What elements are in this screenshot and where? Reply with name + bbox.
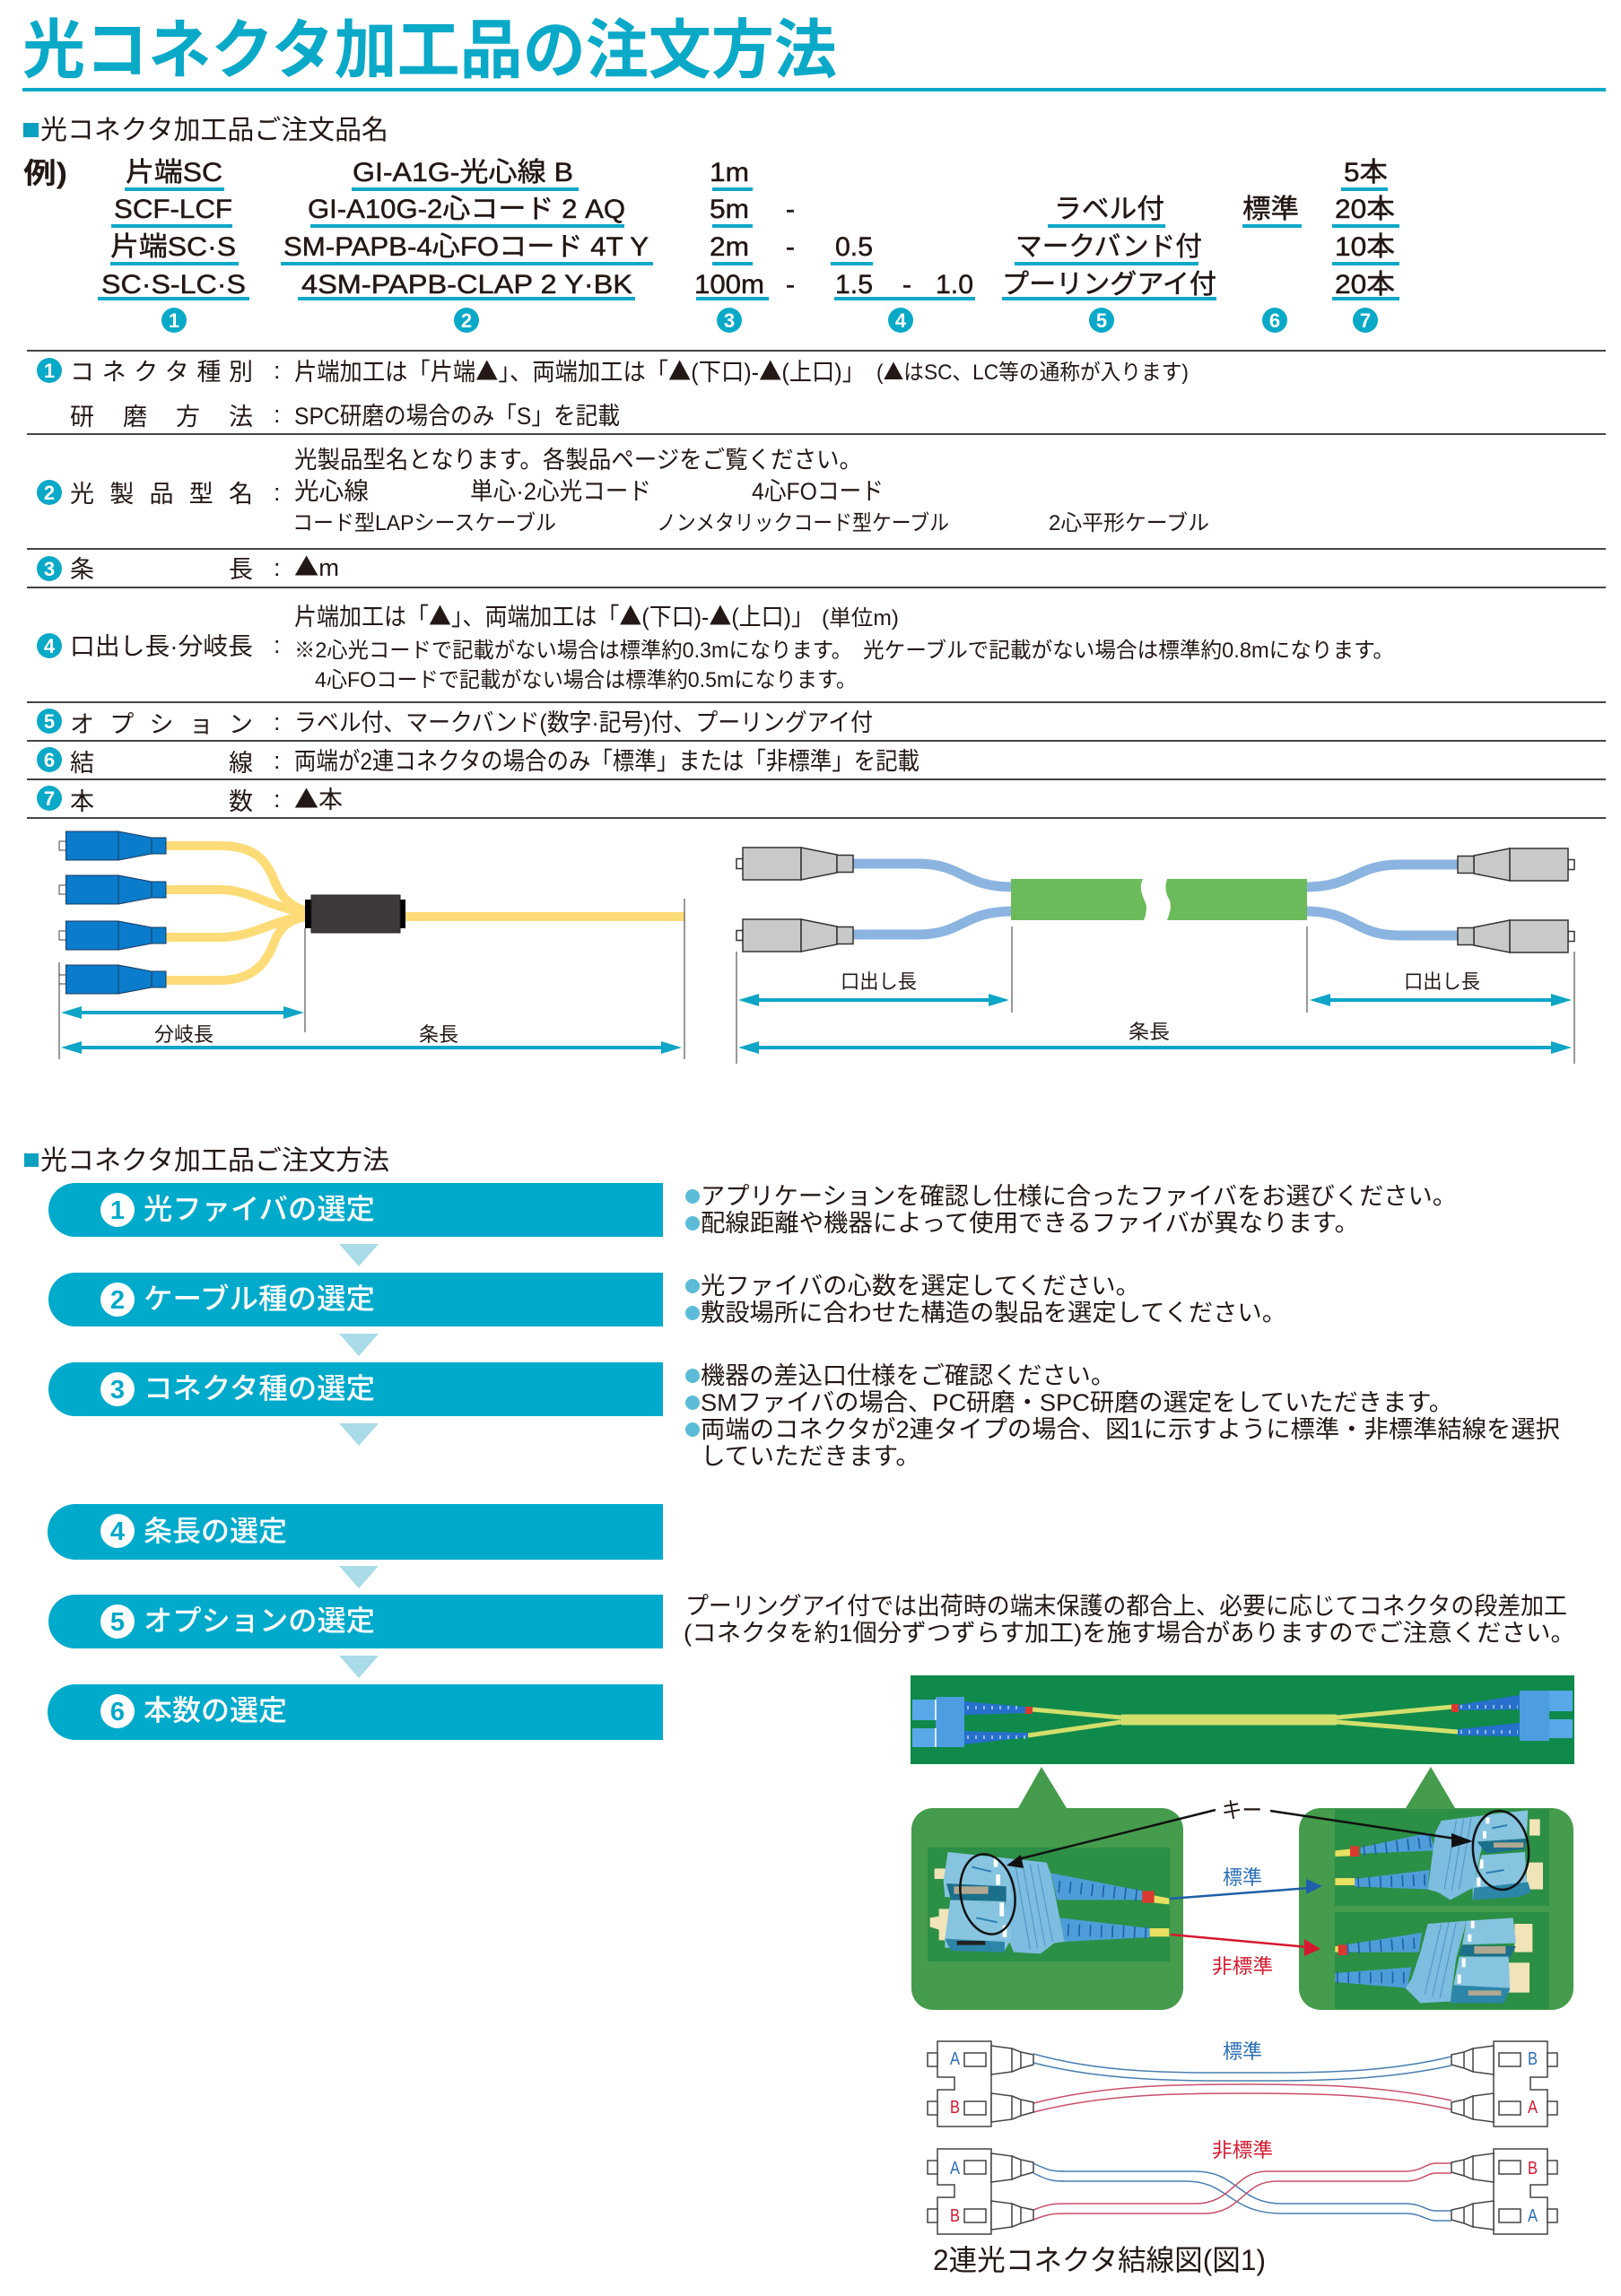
table row 6: wiring: 線 xyxy=(229,750,253,777)
lower connector: non-standard xyxy=(1335,1918,1532,2003)
column 3: length: - xyxy=(786,270,795,300)
port letters: A xyxy=(1528,2098,1538,2118)
step 1 notes xyxy=(685,1183,1457,1237)
table row 7: quantity: 7 xyxy=(44,787,55,810)
column number markers: 1 xyxy=(169,309,179,332)
column 6: wiring: 標準 xyxy=(1242,195,1299,224)
connectors xyxy=(59,831,166,994)
port letters: B xyxy=(1528,2049,1538,2069)
table row 7: quantity: ▲本 xyxy=(294,780,343,815)
column 5: options: ラベル付 xyxy=(1054,195,1164,224)
table row 5: options: : xyxy=(274,709,281,735)
table row 6: wiring xyxy=(37,747,919,777)
table row 4: breakout length: 片端加工は「▲」、両端加工は「▲(下口)-▲(上口)」 xyxy=(294,597,814,632)
example order codes: 例) xyxy=(23,157,67,189)
diagram: breakout cable with branch length xyxy=(59,831,685,1059)
step 6 bar: 6 xyxy=(110,1698,125,1726)
column number markers: 6 xyxy=(1269,309,1280,332)
title xyxy=(22,15,1606,91)
wiring diagram: non-standard: 非標準 xyxy=(1212,2139,1273,2161)
upper connector: standard xyxy=(1335,1810,1543,1900)
column number markers: 4 xyxy=(895,309,907,332)
port letters xyxy=(950,2159,1538,2226)
column 7: quantity: 5本 xyxy=(1344,158,1388,187)
table row 3: length: ▲m xyxy=(294,548,339,583)
heading: order method: 光コネクタ加工品ご注文方法 xyxy=(40,1146,389,1176)
table row 7: quantity xyxy=(37,780,343,815)
column 7: quantity: 20本 xyxy=(1335,195,1395,224)
column 3: length xyxy=(694,158,795,300)
column number markers: 5 xyxy=(1096,309,1107,332)
photo: duplex cable on green mat xyxy=(911,1675,1574,1764)
right connector xyxy=(1451,1691,1573,1741)
panel: right connector close-ups xyxy=(1299,1767,1573,2010)
table row 4: breakout length: 口出し長·分岐長 xyxy=(70,633,253,660)
port letters: A xyxy=(950,2159,961,2179)
step 1 notes: 配線距離や機器によって使用できるファイバが異なります。 xyxy=(701,1210,1359,1237)
column 2: product model xyxy=(281,158,653,300)
yellow fibers xyxy=(166,846,684,980)
port letters: A xyxy=(950,2049,961,2069)
caption: figure 1: 2連光コネクタ結線図(図1) xyxy=(933,2244,1266,2276)
table row 1: connector type and polishing: 1 xyxy=(44,360,55,382)
step 4 bar xyxy=(48,1504,663,1560)
column 2: product model: 4SM-PAPB-CLAP 2 Y·BK xyxy=(301,270,632,300)
column 3: length: - xyxy=(786,232,795,262)
step 3 notes: SMファイバの場合、PC研磨・SPC研磨の選定をしていただきます。 xyxy=(701,1389,1453,1416)
step 2 notes: 光ファイバの心数を選定してください。 xyxy=(701,1273,1140,1300)
column number markers: 3 xyxy=(724,309,735,332)
non-standard arrow and label: 非標準 xyxy=(1212,1955,1273,1978)
column 1: connector type xyxy=(98,158,249,300)
column 3: length: 2m xyxy=(710,232,749,262)
table row 2: product model: コード型LAPシースケーブル xyxy=(292,511,556,535)
column 4: breakout length: 1.5 xyxy=(835,270,873,300)
step 1 bar xyxy=(48,1183,663,1237)
column 4: breakout length: 1.0 xyxy=(936,270,973,300)
step 4 bar: 4 xyxy=(110,1518,125,1546)
table row 6: wiring: 両端が2連コネクタの場合のみ「標準」または「非標準」を記載 xyxy=(294,748,919,775)
arrow: exposed length left xyxy=(738,994,1009,1006)
table row 3: length xyxy=(37,548,339,583)
step 3 notes xyxy=(685,1362,1560,1470)
table row 2: product model: 光心線 xyxy=(294,478,369,505)
table row 2: product model xyxy=(37,447,1209,535)
step 5 bar: 5 xyxy=(110,1608,125,1637)
step 2 notes: 敷設場所に合わせた構造の製品を選定してください。 xyxy=(701,1300,1286,1326)
heading: product name: 光コネクタ加工品ご注文品名 xyxy=(40,116,388,145)
table row 2: product model: : xyxy=(274,479,281,506)
table row 2: product model: 光製品型名 xyxy=(70,481,253,508)
table row 3: length: 長 xyxy=(229,556,253,583)
table row 6: wiring: 結 xyxy=(70,750,94,777)
table row 2: product model: 4心FOコード xyxy=(752,478,884,505)
column number markers xyxy=(161,308,1378,333)
table row 1: connector type and polishing xyxy=(37,352,1189,430)
step 5 notes xyxy=(684,1593,1575,1647)
arrow: step 5 to 6 xyxy=(339,1656,379,1678)
table row 3: length: : xyxy=(274,554,281,581)
column 7: quantity xyxy=(1332,158,1399,300)
table row 4: breakout length: 4 xyxy=(44,635,56,657)
column 3: length: 1m xyxy=(710,158,749,187)
step 3 bar: 3 xyxy=(110,1376,125,1405)
step 6 bar xyxy=(48,1684,663,1740)
table row 2: product model: ノンメタリックコード型ケーブル xyxy=(657,511,949,535)
port letters: B xyxy=(950,2206,960,2226)
table row 1: connector type and polishing: コネクタ種別 xyxy=(70,359,253,386)
column 2: product model: SM-PAPB-4心FOコード 4T Y xyxy=(283,232,649,262)
column 1: connector type: SC·S-LC·S xyxy=(101,270,246,300)
table row 1: connector type and polishing: SPC研磨の場合のみ「S」を記載 xyxy=(294,403,620,430)
column 5: options xyxy=(1002,195,1216,300)
table row 5: options xyxy=(37,709,873,738)
column 4: breakout length: 0.5 xyxy=(835,232,873,262)
step 5 bar xyxy=(48,1595,663,1648)
labels: 口出し長 xyxy=(841,970,917,993)
connectors xyxy=(928,2041,1557,2126)
step 4 bar: 条長の選定 xyxy=(144,1515,287,1547)
table row 7: quantity: 数 xyxy=(229,788,253,815)
column 3: length: 5m xyxy=(710,195,749,224)
step 3 notes: 機器の差込口仕様をご確認ください。 xyxy=(701,1362,1115,1389)
column 3: length: - xyxy=(786,195,795,224)
step 6 bar: 本数の選定 xyxy=(144,1694,287,1726)
table row 6: wiring: 6 xyxy=(44,749,55,771)
step 2 bar xyxy=(48,1273,663,1326)
table row 4: breakout length: ※2心光コードで記載がない場合は標準約0.3mになります。 xyxy=(294,639,852,663)
table row 2: product model: 2心平形ケーブル xyxy=(1049,511,1209,535)
step 5 notes: (コネクタを約1個分ずつずらす加工)を施す場合がありますのでご注意ください。 xyxy=(684,1620,1575,1647)
standard arrow and label: 標準 xyxy=(1223,1866,1262,1889)
table row 6: wiring: : xyxy=(274,747,281,774)
column 5: options: プーリングアイ付 xyxy=(1002,270,1216,300)
fibers xyxy=(1028,1707,1458,1735)
table row 1: connector type and polishing: 片端加工は「片端▲」、両端加工は「▲(下口)-▲(上口)」 xyxy=(294,352,865,387)
step 3 bar xyxy=(48,1362,663,1416)
step 3 bar: コネクタ種の選定 xyxy=(144,1372,375,1405)
column number markers: 7 xyxy=(1360,309,1371,332)
table row 1: connector type and polishing: (▲はSC、LC等の通称が入ります) xyxy=(876,354,1189,386)
diagram: cable with exposed length xyxy=(736,848,1575,1064)
table row 1: connector type and polishing: : xyxy=(274,401,281,428)
key callout with arrows: キー xyxy=(1222,1798,1262,1823)
left connector xyxy=(912,1697,1033,1747)
arrow: branch length xyxy=(61,1006,304,1019)
table row 7: quantity: : xyxy=(274,786,281,813)
arrow: step 3 to 4 xyxy=(339,1423,379,1446)
arrow: step 1 to 2 xyxy=(339,1244,379,1266)
example order codes xyxy=(23,157,1399,333)
wires xyxy=(1033,2163,1451,2221)
table row 4: breakout length xyxy=(37,597,1394,692)
column number markers: 2 xyxy=(461,309,472,332)
column 5: options: マークバンド付 xyxy=(1015,232,1202,262)
port letters: A xyxy=(1528,2206,1538,2226)
table row 3: length: 条 xyxy=(70,556,94,583)
step 5 bar: オプションの選定 xyxy=(144,1605,375,1637)
step 5 notes: プーリングアイ付では出荷時の端末保護の都合上、必要に応じてコネクタの段差加工 xyxy=(685,1593,1567,1620)
table row 5: options: ラベル付、マークバンド(数字·記号)付、プーリングアイ付 xyxy=(294,709,873,736)
table row 1: connector type and polishing: : xyxy=(274,357,281,384)
step 2 bar: ケーブル種の選定 xyxy=(144,1283,375,1315)
step 3 notes: していただきます。 xyxy=(701,1443,920,1470)
connectors xyxy=(928,2149,1557,2234)
column 4: breakout length xyxy=(831,232,975,300)
column 7: quantity: 20本 xyxy=(1335,270,1395,300)
step 2 bar: 2 xyxy=(110,1286,125,1315)
column 2: product model: GI-A10G-2心コード 2 AQ xyxy=(308,195,625,224)
step 3 notes: 両端のコネクタが2連タイプの場合、図1に示すように標準・非標準結線を選択 xyxy=(701,1416,1560,1443)
labels: 分岐長 xyxy=(154,1023,214,1046)
labels xyxy=(841,970,1480,1043)
connector xyxy=(930,1852,1169,1953)
green cable sheath xyxy=(1011,879,1307,920)
column 1: connector type: SCF-LCF xyxy=(114,195,232,224)
column 1: connector type: 片端SC·S xyxy=(110,232,236,262)
port letters: B xyxy=(1528,2159,1538,2179)
port letters xyxy=(950,2049,1538,2118)
wiring diagram: non-standard xyxy=(928,2139,1557,2234)
table row 3: length: 3 xyxy=(44,558,55,580)
standard arrow and label xyxy=(1170,1866,1322,1899)
table row 4: breakout length: 4心FOコードで記載がない場合は標準約0.5mになります。 xyxy=(315,668,857,692)
step 1 bar: 1 xyxy=(110,1196,125,1225)
arrow: step 4 to 5 xyxy=(339,1566,379,1588)
panel: left connector close-up xyxy=(911,1767,1183,2010)
table row 1: connector type and polishing: 研磨方法 xyxy=(70,404,253,430)
wiring diagram: standard: 標準 xyxy=(1223,2040,1262,2063)
labels: 口出し長 xyxy=(1404,970,1480,993)
column 7: quantity: 10本 xyxy=(1335,232,1395,262)
non-standard arrow and label xyxy=(1171,1935,1320,1978)
table row 2: product model: 光製品型名となります。各製品ページをご覧ください。 xyxy=(294,447,862,474)
wires xyxy=(1033,2054,1451,2112)
table row 7: quantity: 本 xyxy=(70,788,94,815)
labels: 条長 xyxy=(1129,1021,1170,1043)
column 1: connector type: 片端SC xyxy=(126,158,222,187)
branch block xyxy=(305,895,405,933)
key callout with arrows xyxy=(954,1798,1532,1939)
port letters: B xyxy=(950,2098,960,2118)
arrow: step 2 to 3 xyxy=(339,1334,379,1356)
labels: 条長 xyxy=(419,1023,458,1046)
table row 5: options: 5 xyxy=(44,710,55,733)
table row 2: product model: 単心·2心光コード xyxy=(470,478,651,505)
table row 4: breakout length: (単位m) xyxy=(822,606,899,631)
column 4: breakout length: - xyxy=(902,270,911,300)
table row 5: options: オプション xyxy=(70,711,253,738)
column 2: product model: GI-A1G-光心線 B xyxy=(353,158,573,187)
step 1 bar: 光ファイバの選定 xyxy=(144,1193,375,1225)
gray connectors xyxy=(736,848,1574,952)
step 2 notes xyxy=(685,1273,1286,1326)
arrow: total length xyxy=(61,1041,682,1054)
step 1 notes: アプリケーションを確認し仕様に合ったファイバをお選びください。 xyxy=(701,1183,1457,1210)
arrow: exposed length right xyxy=(1310,994,1572,1006)
table row 4: breakout length: : xyxy=(274,631,281,658)
table row 4: breakout length: 光ケーブルで記載がない場合は標準約0.8mになります。 xyxy=(863,639,1394,663)
blue fibers xyxy=(853,864,1459,935)
column 3: length: 100m xyxy=(694,270,764,300)
arrow: total length xyxy=(738,1041,1572,1054)
table row 2: product model: 2 xyxy=(44,482,55,504)
labels xyxy=(154,1023,458,1046)
title: 光コネクタ加工品の注文方法 xyxy=(22,15,837,87)
wiring diagram: standard xyxy=(928,2040,1557,2126)
